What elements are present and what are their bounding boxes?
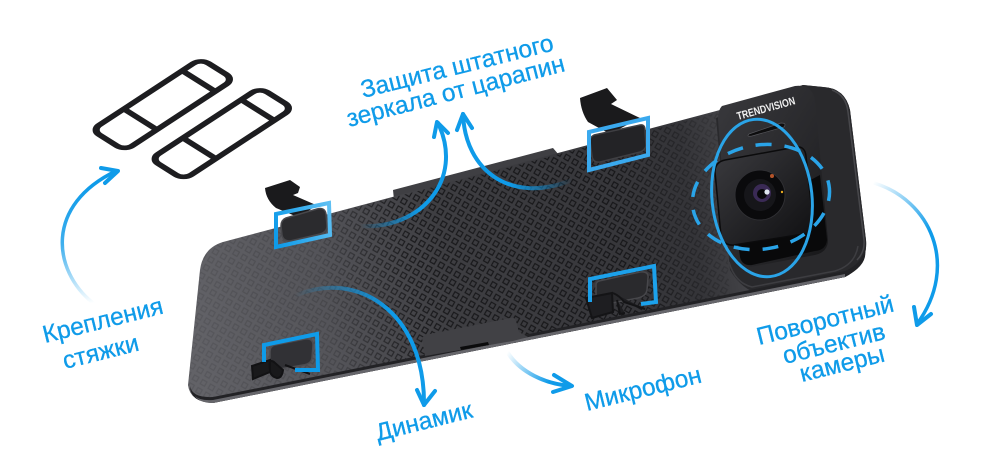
- rear housing: [716, 85, 866, 301]
- camera pod: [718, 86, 828, 268]
- rotation ellipses: [684, 114, 838, 282]
- label: strap mounts: [40, 293, 166, 375]
- label: microphone: Микрофон: [582, 362, 704, 417]
- port slot: [460, 342, 489, 350]
- label: speaker: Динамик: [373, 397, 475, 447]
- label: strap mounts: Крепления: [40, 293, 166, 349]
- rubber mounts: [92, 59, 293, 180]
- frame: bottom right mount: [590, 266, 656, 304]
- mirror body: [188, 85, 866, 403]
- label: rotating camera lens: [754, 291, 897, 388]
- dashed rotation ring: [684, 134, 838, 260]
- brand name: TRENDVISION: [736, 95, 797, 123]
- mount strap 1: [92, 59, 234, 151]
- arrow: to microphone: [508, 353, 572, 392]
- label: rotating camera lens: камеры: [797, 341, 887, 388]
- right bottom pad: [596, 272, 648, 305]
- housing inset edge: [729, 246, 858, 287]
- camera head: [715, 147, 813, 245]
- arrow: to speaker: [297, 288, 435, 405]
- bottom edge band: [190, 250, 865, 403]
- right top pad: [590, 125, 646, 162]
- highlight frames: [264, 118, 656, 370]
- mirror dash cam: [180, 80, 866, 420]
- left bottom pad: [270, 339, 313, 369]
- frame: bottom left mount: [264, 334, 318, 370]
- bottom mount block: [422, 318, 528, 356]
- frame: top left mount: [276, 203, 330, 247]
- solid rotation ring: [704, 114, 820, 282]
- label: rotating camera lens: Поворотный: [754, 291, 897, 351]
- arrow: to mounts: [62, 168, 118, 303]
- top mount bump: [393, 148, 559, 210]
- label: scratch protection: зеркала от царапин: [344, 51, 568, 133]
- housing side highlight: [832, 90, 864, 260]
- arrow: scratch protection left: [360, 122, 448, 226]
- camera recess: [735, 175, 827, 265]
- label: strap mounts: стяжки: [60, 330, 142, 375]
- mount strap 2: [151, 88, 293, 180]
- diamond texture: [188, 114, 729, 397]
- arrow: to rotating lens label: [874, 183, 937, 325]
- frame: top right mount: [589, 118, 648, 170]
- right clip: [580, 88, 640, 134]
- right bottom strap: [586, 293, 645, 318]
- left clip: [265, 180, 316, 218]
- left top pad: [281, 209, 327, 241]
- arrow: scratch protection right: [457, 114, 572, 188]
- bottom lip: [195, 274, 845, 403]
- lens: [735, 170, 785, 220]
- label: scratch protection: Защита штатного: [358, 30, 556, 104]
- label: rotating camera lens: объектив: [780, 318, 888, 370]
- speaker slot: [748, 123, 785, 136]
- left bottom strap: [252, 360, 310, 379]
